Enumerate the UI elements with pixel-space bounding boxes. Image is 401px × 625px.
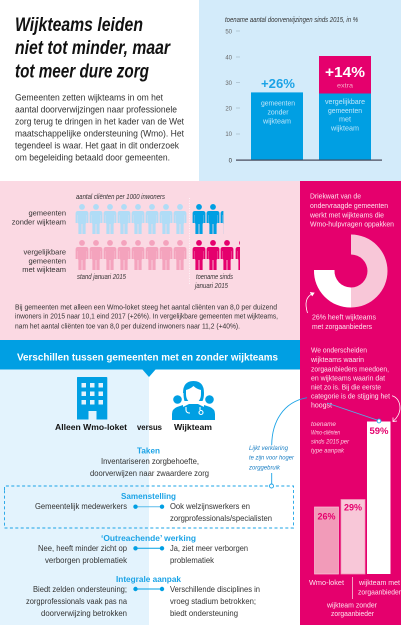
intro text: om begeleiding betaald door gemeenten. (15, 152, 170, 162)
section: Taken: Inventariseren zorgbehoefte, (101, 457, 199, 466)
text: driekwart: Driekwart van de (310, 192, 361, 200)
text: toename wmo-clienten: type aanpak (311, 448, 345, 454)
explanation text (15, 302, 278, 330)
bar: 26% Wmo-loket (314, 507, 338, 574)
bar: gemeenten zonder wijkteam (251, 76, 303, 160)
section: Integrale aanpak: biedt ondersteuning (170, 609, 238, 618)
bar: vergelijkbare gemeenten met wijkteam: extra (337, 82, 353, 90)
section: Outreachende werking: verborgen problematiek (45, 556, 128, 565)
bar: gemeenten zonder wijkteam: zonder (268, 108, 289, 116)
section: Samenstelling: Ook welzijnswerkers en (170, 502, 250, 511)
text: toename wmo-clienten: Wmo-cliënten (311, 430, 340, 436)
label: wijkteam met zorgaanbieder (358, 578, 401, 596)
text: toename wmo-clienten: sinds 2015 per (311, 438, 350, 446)
title: niet tot minder, maar (15, 37, 171, 59)
y axis labels: 20 (225, 106, 233, 112)
title: Wijkteams leiden (15, 14, 143, 36)
explanation text: nam het aantal cliënten toe van 8,0 per duizend inwoners naar 11,2 (+40%). (15, 321, 240, 330)
arrow: to donut (306, 292, 314, 313)
banner (0, 340, 300, 377)
section: Samenstelling: Samenstelling (121, 491, 176, 501)
row label: zonder wijkteam (12, 208, 66, 226)
bar: 59% wijkteam met zorgaanbieder (367, 422, 390, 574)
row label: met wijkteam (22, 248, 66, 274)
text: we onderscheiden: We onderscheiden (311, 346, 367, 354)
label: wijkteam zonder zorgaanbieder (326, 600, 377, 618)
bar: gemeenten zonder wijkteam: wijkteam (262, 116, 291, 126)
intro text: aantal doorverwijzingen naar professionele (15, 104, 177, 114)
explanation text: inwoners in 2015 naar 10,1 eind 2017 (+26%). In vergelijkbare gemeenten met wijkteams, (15, 312, 278, 321)
section: Integrale aanpak: Integrale aanpak (116, 574, 181, 584)
y axis labels: 30 (225, 81, 233, 87)
bar: vergelijkbare gemeenten met wijkteam: wijkteam (330, 124, 359, 132)
bar: 29% wijkteam zonder zorgaanbieder (341, 500, 365, 574)
text: 26% (312, 312, 376, 331)
section: Integrale aanpak (26, 574, 260, 618)
y axis labels (225, 30, 233, 164)
intro text: maatschappelijke ondersteuning (Wmo). Het (15, 128, 184, 138)
text: we onderscheiden (310, 346, 391, 410)
bar: gemeenten zonder wijkteam: +26% (261, 76, 295, 91)
bar: gemeenten zonder wijkteam: gemeenten (261, 98, 295, 108)
text: 26%: met zorgaanbieders (312, 322, 372, 331)
pictogram heading: aantal cliënten per 1000 inwoners (76, 194, 165, 201)
section: Outreachende werking: ‘Outreachende’ werking (101, 533, 196, 543)
arrow: to 59% bar (392, 396, 400, 422)
label: stand januari 2015: stand januari 2015 (77, 274, 126, 281)
row label: met wijkteam: met wijkteam (22, 265, 66, 274)
section: Taken (90, 446, 209, 478)
banner: Verschillen tussen gemeenten met en zonder wijkteams (17, 352, 278, 364)
y axis labels: 10 (225, 132, 233, 138)
connector: hoogst to 59% (327, 403, 381, 423)
intro text: tegendeel is waar. Het gaat in dit onderzoek (15, 140, 179, 150)
callout: lijkt verklaring: te zijn voor hoger (249, 454, 295, 462)
panel: intro (0, 0, 199, 181)
section: Samenstelling (4, 486, 294, 528)
intro text: zorg terug te dringen in het kader van de Wet (15, 116, 184, 126)
bar: 29% wijkteam zonder zorgaanbieder: 29% (344, 502, 362, 512)
icon: building (77, 377, 107, 420)
panel: comparison background (0, 369, 300, 625)
text: driekwart: Wmo-hulpvragen oppakken (310, 220, 394, 228)
row label: zonder wijkteam: zonder wijkteam (12, 218, 66, 226)
section: Integrale aanpak: Verschillende disciplines in (170, 585, 260, 594)
label: Wijkteam: Wijkteam (174, 422, 212, 432)
panel: clients per 1000 inhabitants (0, 181, 300, 340)
row label: met wijkteam: gemeenten (28, 256, 66, 266)
label: toename sinds januari 2015 (194, 274, 233, 290)
explanation text: Bij gemeenten met alleen een Wmo-loket steeg het aantal cliënten van 8,0 per duizend (15, 302, 277, 312)
section: Integrale aanpak: Biedt zelden ondersteuning; (33, 585, 127, 594)
icon: medical team (172, 381, 215, 420)
text: toename wmo-clienten: toename (311, 421, 336, 428)
callout: lijkt verklaring: Lijkt verklaring (249, 445, 288, 452)
section: Outreachende werking: Ja, ziet meer verborgen (170, 544, 248, 553)
y axis labels: 40 (225, 56, 233, 62)
label: Alleen Wmo-loket: Alleen Wmo-loket (55, 422, 127, 432)
y axis labels: 50 (225, 30, 233, 36)
label: wijkteam zonder zorgaanbieder: wijkteam zonder (326, 600, 377, 610)
bar: vergelijkbare gemeenten met wijkteam: +14% (325, 65, 365, 81)
text: 26%: 26% heeft wijkteams (312, 312, 376, 322)
section: Samenstelling: Gemeentelijk medewerkers (35, 502, 127, 511)
section: Taken: Taken (137, 446, 160, 456)
y axis labels: 0 (229, 158, 233, 164)
section: Integrale aanpak: zorgprofessionals vaak pas na (26, 597, 128, 606)
intro text: Gemeenten zetten wijkteams in om het (15, 92, 163, 102)
section: Samenstelling: zorgprofessionals/specialisten (170, 514, 272, 523)
intro text (15, 92, 184, 162)
connector: verklaring line (270, 398, 307, 488)
label: versus: versus (137, 422, 162, 432)
title (15, 14, 171, 82)
section: Integrale aanpak: vroeg stadium betrokken; (170, 597, 256, 606)
section: Outreachende werking: problematiek (170, 556, 215, 565)
text: driekwart: werkt met wijkteams die (309, 210, 384, 220)
panel: right magenta column (300, 181, 401, 625)
bar: 26% Wmo-loket: 26% (318, 512, 336, 522)
chart title: toename aantal doorverwijzingen sinds 2015, in % (225, 17, 358, 24)
label: toename sinds januari 2015: toename sinds (196, 274, 233, 281)
label: wijkteam zonder zorgaanbieder: zorgaanbieder (331, 609, 374, 618)
callout: lijkt verklaring (248, 445, 295, 472)
text: driekwart (309, 192, 394, 228)
section: Outreachende werking: Nee, heeft minder zicht op (38, 544, 128, 553)
bar: vergelijkbare gemeenten met wijkteam: met (339, 114, 352, 124)
pictogram row: zonder wijkteam (76, 204, 233, 234)
panel: bar chart (199, 0, 401, 181)
bar: vergelijkbare gemeenten met wijkteam: gemeenten (328, 106, 362, 115)
text: we onderscheiden: hoogst (311, 400, 333, 410)
bar: vergelijkbare gemeenten met wijkteam (319, 56, 371, 160)
label: Wmo-loket: Wmo-loket (309, 578, 345, 587)
text: we onderscheiden: niet zo is. Bij die eerste (311, 382, 381, 392)
donut chart (314, 234, 387, 308)
callout: lijkt verklaring: zorggebruik (248, 464, 281, 472)
pictogram row: met wijkteam (76, 240, 248, 270)
text: we onderscheiden: en wijkteams waarin dat (311, 374, 386, 382)
text: we onderscheiden: zorgaanbieders meedoen, (311, 364, 389, 374)
row label: zonder wijkteam: gemeenten (28, 208, 66, 218)
section: Integrale aanpak: doorverwijzing betrokken (41, 609, 127, 618)
bar: vergelijkbare gemeenten met wijkteam: vergelijkbare (325, 97, 365, 106)
section: Outreachende werking (38, 533, 248, 565)
bar: 59% wijkteam met zorgaanbieder: 59% (370, 426, 388, 436)
title: tot meer dure zorg (15, 60, 149, 82)
text: toename wmo-clienten (311, 421, 350, 454)
section: Taken: doorverwijzen naar zwaardere zorg (90, 469, 209, 478)
row label: met wijkteam: vergelijkbare (23, 248, 66, 256)
text: we onderscheiden: wijkteams waarin (310, 355, 364, 364)
text: we onderscheiden: categorie is de stijging het (311, 392, 391, 400)
text: driekwart: ondervraagde gemeenten (310, 201, 388, 210)
label: toename sinds januari 2015: januari 2015 (194, 283, 228, 290)
